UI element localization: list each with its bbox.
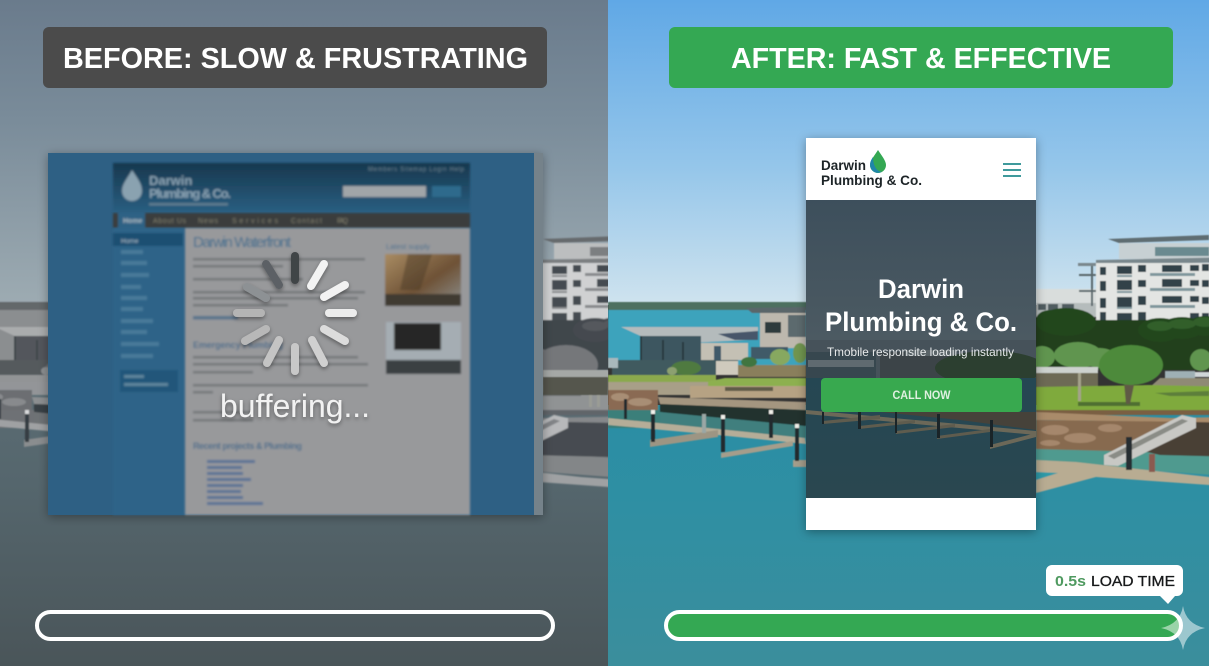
icon: water drop xyxy=(870,150,886,173)
loading spinner xyxy=(237,256,353,371)
old site main content: Darwin Waterfront xyxy=(193,234,292,251)
old site navigation bar: FAQ xyxy=(337,218,349,225)
grey sky background xyxy=(0,0,608,303)
old site header xyxy=(113,163,470,213)
old site main content: Emergency Plumbing xyxy=(193,340,283,350)
desaturated building and trees, right strip xyxy=(543,236,608,378)
panel: before (slow and frustrating) xyxy=(0,0,609,666)
old site sidebar: Home xyxy=(121,238,139,245)
call to action button: CALL NOW xyxy=(892,390,951,402)
hero title xyxy=(825,274,1017,337)
teal water background xyxy=(608,405,1209,666)
load time callout: 0.5s xyxy=(1055,573,1086,590)
load time callout: LOAD TIME xyxy=(1091,573,1175,590)
old site header: Plumbing & Co. xyxy=(149,186,231,201)
desaturated waterfront, left strip xyxy=(0,301,48,448)
old site header: Members Sitemap Login Help xyxy=(368,167,465,173)
old site navigation bar xyxy=(113,213,470,229)
logo: Darwin Plumbing & Co.: Plumbing & Co. xyxy=(821,172,922,188)
call to action button xyxy=(821,378,1022,412)
hero subtitle: Tmobile responsite loading instantly xyxy=(827,345,1014,359)
old site main content xyxy=(185,228,470,515)
heading: after: AFTER: FAST & EFFECTIVE xyxy=(731,43,1111,75)
old desktop website screenshot xyxy=(48,153,543,515)
panel: after (fast and effective) xyxy=(608,0,1209,666)
blue sky background xyxy=(608,0,1209,305)
hero title: Darwin xyxy=(878,274,964,304)
filled progress bar xyxy=(666,612,1181,639)
hero title: Plumbing & Co. xyxy=(825,307,1017,337)
mobile website mockup xyxy=(806,138,1045,530)
old site header: Darwin xyxy=(149,173,192,188)
heading: after xyxy=(669,27,1173,88)
grey water background xyxy=(0,303,608,666)
load time callout xyxy=(1046,565,1183,604)
empty progress bar xyxy=(37,612,553,639)
buffering label: buffering... xyxy=(220,388,370,424)
logo: Darwin Plumbing & Co.: Darwin xyxy=(821,157,866,173)
heading: before: BEFORE: SLOW & FRUSTRATING xyxy=(63,43,528,75)
old site navigation bar: Contact xyxy=(291,218,322,225)
logo: Darwin Plumbing & Co. xyxy=(821,150,922,188)
icon: sparkle xyxy=(1161,606,1205,650)
desaturated shelter xyxy=(543,370,608,407)
desaturated stairs and rocks, right strip xyxy=(543,378,608,488)
old site navigation bar: Home xyxy=(123,218,143,225)
old site navigation bar: News xyxy=(198,218,218,225)
old site main content: Recent projects & Plumbing xyxy=(193,441,302,451)
old site sidebar xyxy=(113,228,185,515)
old site navigation bar: About Us xyxy=(153,218,186,225)
old site navigation bar: Services xyxy=(232,218,278,225)
icon: hamburger menu xyxy=(1003,163,1021,177)
old site main content: Latest supply xyxy=(386,242,430,251)
waterfront scene with buildings and marina xyxy=(608,235,1209,493)
heading: before xyxy=(43,27,547,88)
hero image with dark overlay xyxy=(806,200,1045,498)
